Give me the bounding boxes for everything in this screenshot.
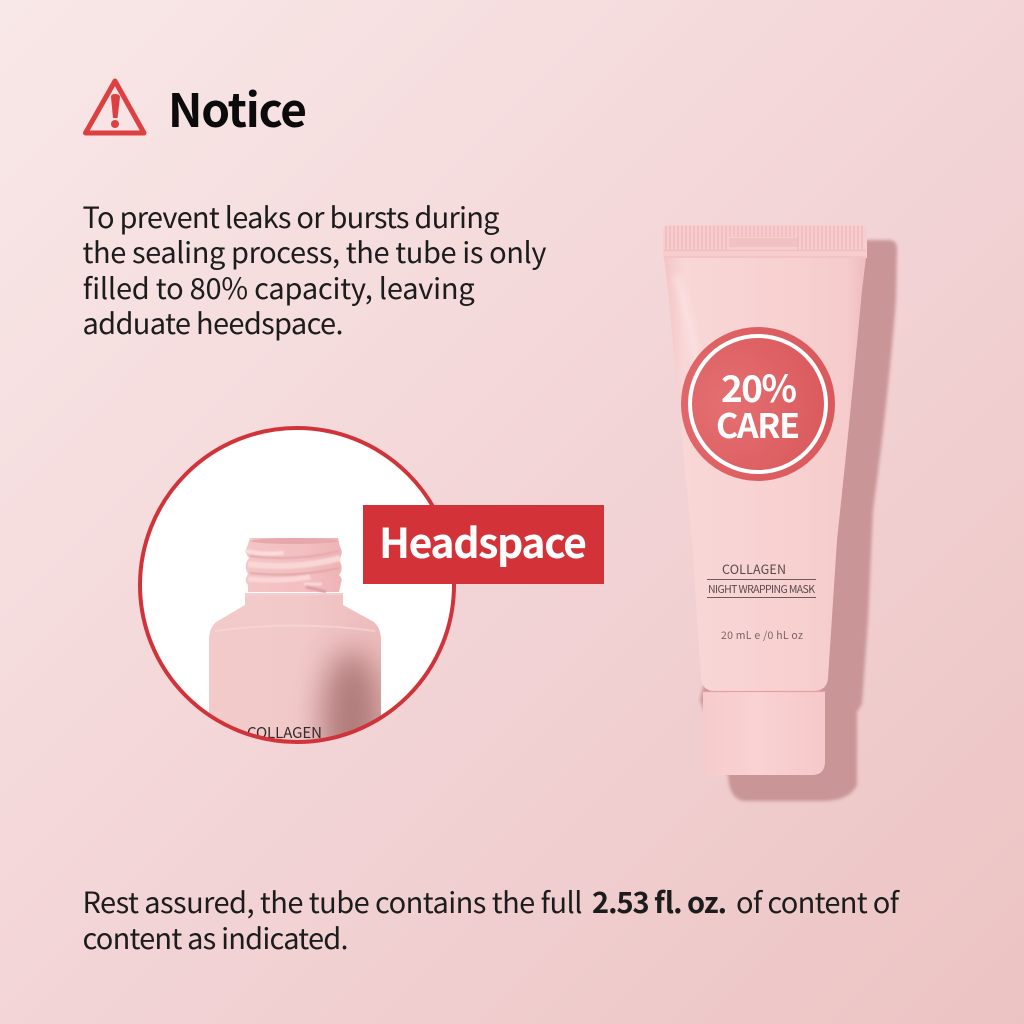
- tube body: [664, 258, 866, 691]
- text block: explanation: adduate heedspace.: [82, 301, 344, 343]
- icon: warning triangle: [86, 81, 144, 133]
- tube label: NIGHT WRAPPING MASK: [708, 582, 815, 597]
- bottle label: COLLAGEN: [247, 722, 322, 743]
- title: Notice: [168, 75, 307, 141]
- tube label: [707, 559, 816, 643]
- tube label: 20 mL e /0 hL oz: [721, 628, 803, 643]
- text block: reassurance: [82, 880, 901, 958]
- text block: reassurance: of content of: [736, 880, 901, 922]
- bottle body shading: [322, 650, 382, 790]
- product tube illustration: [663, 225, 897, 801]
- badge: 20% care: CARE: [716, 399, 800, 448]
- callout: headspace: [363, 505, 604, 584]
- tube label: COLLAGEN: [722, 559, 786, 578]
- text block: reassurance: content as indicated.: [82, 916, 348, 958]
- tube highlight: [676, 275, 704, 410]
- badge: 20% care: 20%: [721, 359, 797, 413]
- text block: explanation: [82, 195, 546, 343]
- text block: explanation: filled to 80% capacity, leaving: [83, 266, 475, 308]
- magnified neck circle: [138, 426, 456, 744]
- tube cap: [703, 692, 825, 775]
- tube crimp: [663, 225, 867, 258]
- tube shadow: [700, 240, 897, 801]
- text block: explanation: the sealing process, the tube is only: [82, 230, 546, 272]
- bottle neck and threads: [246, 538, 342, 592]
- text block: reassurance: Rest assured, the tube contains the full: [82, 880, 582, 922]
- callout: headspace: Headspace: [379, 510, 587, 570]
- badge: 20% care: [681, 327, 835, 481]
- text block: explanation: To prevent leaks or bursts during: [82, 195, 500, 237]
- bottle shoulder and body: [209, 593, 381, 740]
- text block: reassurance: 2.53 fl. oz.: [592, 880, 727, 922]
